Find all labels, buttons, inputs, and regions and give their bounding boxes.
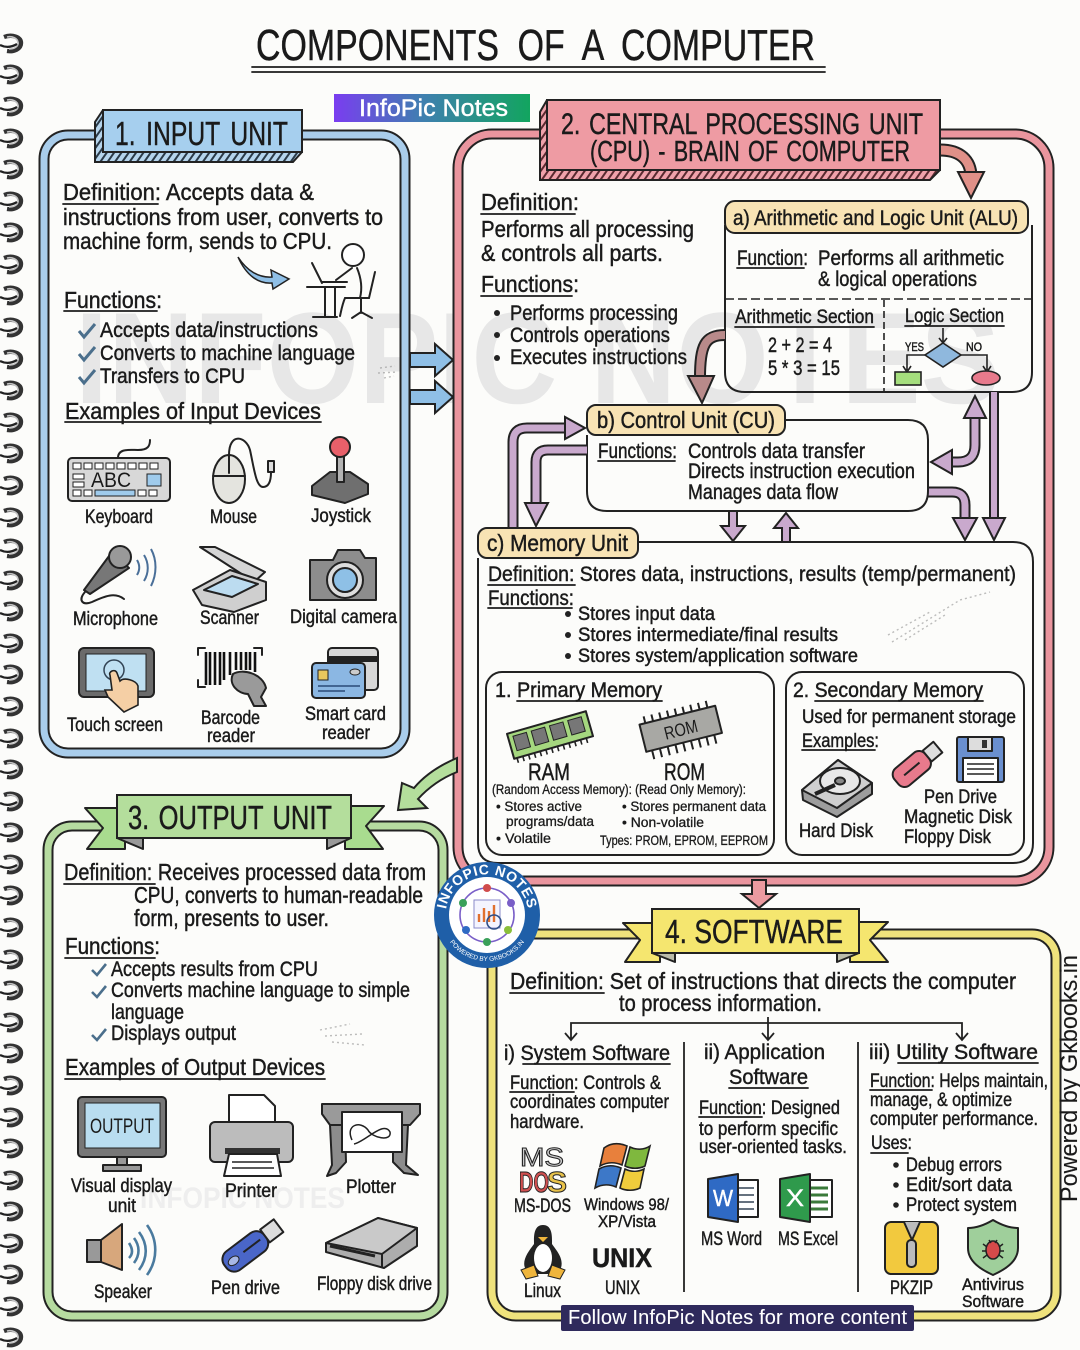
- label: microphone: Microphone: [73, 609, 158, 630]
- text: input functions: Functions:: [64, 287, 162, 313]
- text: CPU definition: Performs all processing: [481, 216, 694, 242]
- arrow: input to CPU lower: [410, 381, 453, 413]
- label: antivirus software: [962, 1275, 1024, 1311]
- icon: barcode reader: [198, 648, 266, 706]
- label: other storage devices: Floppy Disk: [904, 827, 991, 848]
- text: utility software function: manage, & optimize: [870, 1090, 1012, 1111]
- text: RAM notes: • Stores active: [496, 799, 582, 814]
- arrow: CPU heading to ALU: [940, 150, 984, 198]
- icon: printer: [210, 1095, 293, 1176]
- icon: MS-DOS logo: MS: [520, 1142, 564, 1172]
- footer banner: Follow InfoPic Notes for more content: [568, 1307, 907, 1329]
- text: utility software function: Function: Helps maintain,: [870, 1071, 1048, 1092]
- icon: visual display unit: [78, 1097, 166, 1171]
- icon: MS-DOS logo: S: [547, 1167, 567, 1199]
- text: ROM notes: [600, 799, 768, 848]
- heading: CPU: 2. CENTRAL PROCESSING UNIT: [561, 108, 923, 141]
- label: other storage devices: Magnetic Disk: [904, 807, 1012, 828]
- arrow: memory up to control unit: [774, 513, 798, 542]
- text: input definition: machine form, sends to CPU.: [63, 228, 332, 254]
- arrow: input to CPU upper: [410, 344, 453, 376]
- text: ALU function: & logical operations: [818, 268, 977, 291]
- smudge marks: [320, 366, 990, 1045]
- heading: secondary memory: 2. Secondary Memory: [793, 679, 983, 702]
- panel: control unit: [587, 405, 928, 511]
- arrow: control unit to memory left: [525, 450, 587, 526]
- label: Windows: Windows 98/: [584, 1195, 669, 1214]
- badge: InfoPic Notes logo: POWERED BY GKBOOKS.IN: [450, 940, 524, 961]
- panel: output unit: [48, 795, 443, 1316]
- tag: memory unit: c) Memory Unit: [487, 530, 629, 556]
- tag: ALU: a) Arithmetic and Logic Unit (ALU): [733, 207, 1018, 230]
- arrow: CPU to output unit: [398, 758, 457, 810]
- panel: secondary memory: [786, 672, 1024, 855]
- text: output functions: Displays output: [111, 1022, 236, 1045]
- text: ROM notes: • Non-volatile: [622, 815, 704, 830]
- text: secondary memory note: Used for permanent storage: [802, 707, 1016, 728]
- text: memory functions: Stores system/application software: [578, 646, 858, 667]
- text: output definition: form, presents to user.: [134, 905, 329, 931]
- text: input functions: Accepts data/instructions: [100, 319, 318, 342]
- arrow: control unit down to memory: [721, 511, 745, 541]
- icon: ROM chip: [638, 699, 724, 761]
- label: Windows: [584, 1195, 669, 1231]
- icon: pen drive: [889, 739, 945, 790]
- title: COMPONENTS OF A COMPUTER: [256, 21, 815, 70]
- icon: arrow to user: [238, 257, 289, 289]
- label: barcode reader: [201, 708, 260, 747]
- text: ALU function: Performs all arithmetic: [818, 247, 1004, 270]
- icon: MS Word: W: [713, 1185, 733, 1211]
- arrows: software branching tree: [565, 1017, 968, 1040]
- text: input functions: Converts to machine language: [100, 342, 355, 365]
- text: RAM notes: • Volatile: [496, 831, 551, 846]
- text: arithmetic section: 2 + 2 = 4: [768, 334, 832, 357]
- badge: InfoPic Notes logo: INFOPIC NOTES: [436, 864, 536, 908]
- text: utility software uses: Debug errors: [906, 1155, 1002, 1176]
- icon: keyboard: [68, 440, 170, 501]
- text: input definition: instructions from user, converts to: [63, 204, 383, 230]
- text: memory functions: Stores intermediate/final results: [578, 625, 838, 646]
- text: control unit functions: Functions:: [598, 440, 677, 463]
- text: output definition: Definition: Receives processed data from: [64, 859, 426, 885]
- column: application software: [699, 1041, 847, 1250]
- label: antivirus software: Software: [962, 1292, 1024, 1311]
- heading: system software: i) System Software: [504, 1042, 670, 1065]
- tag: control unit: b) Control Unit (CU): [597, 407, 775, 433]
- badge: InfoPic Notes logo: [434, 862, 540, 968]
- icon: person at computer: [307, 244, 375, 318]
- text: ALU function: Function:: [737, 247, 808, 270]
- arrow: control unit to memory right: [928, 492, 977, 540]
- label: barcode reader: Barcode: [201, 708, 260, 729]
- heading: software ribbon: [623, 909, 888, 962]
- heading: primary memory: 1. Primary Memory: [495, 679, 662, 702]
- text: ROM notes: • Stores permanent data: [622, 799, 766, 814]
- watermark: large INFOPIC NOTES: INFOPIC NOTES: [75, 285, 1000, 431]
- watermark: small INFOPIC NOTES: INFOPIC NOTES: [140, 1182, 345, 1215]
- label: floppy disk drive: Floppy disk drive: [317, 1274, 432, 1295]
- heading: examples of input devices: Examples of Input Devices: [65, 398, 321, 424]
- arrow: CPU to software: [742, 880, 776, 908]
- arrow: control unit and ALU two-way: [931, 396, 986, 474]
- icon: ROM chip: ROM: [662, 716, 700, 744]
- text: output functions: language: [111, 1001, 184, 1024]
- icon: MS Excel: [780, 1174, 832, 1222]
- text and flowchart: logic section: NO: [966, 340, 982, 354]
- text: utility software uses: Uses:: [871, 1133, 912, 1154]
- text: memory functions: [488, 587, 858, 667]
- text: ALU function: [737, 247, 1004, 291]
- label: smart card reader: Smart card: [305, 704, 386, 725]
- icon: mouse: [213, 439, 274, 503]
- icon: digital camera: [310, 550, 376, 600]
- text: application software function: user-oriented tasks.: [699, 1137, 847, 1158]
- text: output functions: Accepts results from CPU: [111, 958, 318, 981]
- text: memory functions: Stores input data: [578, 604, 715, 625]
- text: ROM notes: Types: PROM, EPROM, EEPROM: [600, 833, 768, 848]
- text: application software function: to perform specific: [699, 1119, 838, 1140]
- label: MS Excel: MS Excel: [778, 1229, 838, 1250]
- panel: arithmetic and logic unit: [725, 201, 1032, 392]
- label: touch screen: Touch screen: [67, 715, 163, 736]
- label: keyboard: Keyboard: [85, 507, 153, 528]
- text: system software function: coordinates computer: [510, 1092, 670, 1113]
- heading: application software: ii) Application: [704, 1041, 825, 1064]
- heading: examples of output devices: Examples of Output Devices: [65, 1054, 325, 1080]
- heading: utility software: iii) Utility Software: [869, 1041, 1038, 1064]
- label: joystick: Joystick: [311, 506, 371, 527]
- text: system software function: hardware.: [510, 1112, 584, 1133]
- heading: CPU: [540, 100, 940, 180]
- label: barcode reader: reader: [207, 726, 256, 747]
- label: digital camera: Digital camera: [290, 607, 397, 628]
- text and flowchart: logic section: [895, 306, 1004, 385]
- icon: MS Word: [708, 1174, 758, 1222]
- label: Windows: XP/Vista: [598, 1212, 656, 1231]
- label: scanner: Scanner: [200, 608, 260, 629]
- label: other storage devices: [904, 787, 1012, 848]
- text: input definition: Definition: Accepts data &: [63, 179, 314, 205]
- label: hard disk: Hard Disk: [799, 821, 873, 842]
- icon: keyboard: ABC: [91, 469, 131, 492]
- text: CPU definition: & controls all parts.: [481, 240, 663, 266]
- text: control unit functions: Manages data flow: [688, 481, 839, 504]
- text: memory definition: Definition: Stores data, instructions, results (temp/permanent): [488, 563, 1016, 586]
- text: arithmetic section: 5 * 3 = 15: [768, 357, 840, 380]
- icon: floppy disk drive: [326, 1218, 417, 1268]
- heading: CPU: (CPU) - BRAIN OF COMPUTER: [590, 136, 910, 168]
- text: output functions: Converts machine language to simple: [111, 979, 410, 1002]
- arrow: memory to control unit left: [513, 417, 585, 528]
- text: examples: Examples:: [802, 731, 879, 752]
- label: visual display unit: [71, 1176, 172, 1217]
- text: utility software uses: [871, 1133, 1017, 1216]
- text: input functions: [64, 287, 355, 388]
- icon: MS-DOS logo: DO: [519, 1167, 549, 1199]
- label: ROM: ROM: [664, 759, 705, 786]
- label: speaker: Speaker: [94, 1282, 153, 1303]
- panel: input unit: [44, 110, 405, 753]
- text: control unit functions: [598, 440, 915, 504]
- text: control unit functions: Directs instruction execution: [688, 460, 915, 483]
- text: system software function: Function: Controls &: [510, 1073, 661, 1094]
- icon: RAM stick: [507, 711, 594, 764]
- text: utility software function: [870, 1071, 1048, 1130]
- text: utility software uses: Protect system: [906, 1195, 1017, 1216]
- text: CPU functions: Controls operations: [510, 324, 670, 347]
- label: smart card reader: reader: [322, 723, 371, 744]
- text: input functions: Transfers to CPU: [100, 365, 245, 388]
- text: output functions: Functions:: [65, 933, 160, 959]
- panel: central processing unit: [458, 100, 1049, 881]
- label: visual display unit: unit: [108, 1196, 137, 1217]
- icon: hard disk: [802, 760, 872, 817]
- icon: MS-DOS logo: [519, 1142, 567, 1199]
- text: application software function: [699, 1098, 847, 1158]
- icon: antivirus shield: [968, 1220, 1018, 1275]
- panel: primary memory: [486, 672, 774, 855]
- label: printer: Printer: [225, 1181, 278, 1202]
- heading: application software: [704, 1041, 825, 1089]
- brand banner: InfoPic Notes: [359, 95, 508, 122]
- arrow: ALU to memory: [983, 392, 1005, 540]
- icon: touch screen: [79, 648, 154, 712]
- icon: speaker: [87, 1224, 155, 1275]
- text: utility software uses: Edit/sort data: [906, 1175, 1012, 1196]
- text: system software function: [510, 1073, 670, 1133]
- heading: software ribbon: 4. SOFTWARE: [665, 913, 843, 950]
- icon: smart card: [312, 648, 378, 698]
- text and flowchart: logic section: Logic Section: [905, 306, 1004, 327]
- icon: PKZIP: [885, 1222, 938, 1274]
- text: CPU functions: [481, 271, 687, 369]
- label: antivirus software: Antivirus: [962, 1275, 1024, 1294]
- column: system software: [504, 1042, 670, 1302]
- text and flowchart: logic section: YES: [905, 340, 924, 354]
- heading: output unit ribbon: [85, 795, 384, 849]
- spiral binding: [0, 36, 21, 1345]
- text: CPU functions: Functions:: [481, 271, 579, 297]
- label: other storage devices: Pen Drive: [924, 787, 997, 808]
- label: smart card reader: [305, 704, 386, 744]
- arrow: ALU to control unit: [688, 335, 725, 403]
- text: software definition: to process information.: [619, 990, 822, 1016]
- text: arithmetic section: Arithmetic Section: [735, 307, 874, 328]
- text: CPU definition: [481, 189, 694, 266]
- label: PKZIP: PKZIP: [890, 1278, 933, 1299]
- label: plotter: Plotter: [346, 1177, 397, 1198]
- label: visual display unit: Visual display: [71, 1176, 172, 1197]
- icon: joystick: [312, 437, 368, 503]
- text: memory functions: Functions:: [488, 587, 574, 610]
- text: control unit functions: Controls data transfer: [688, 440, 865, 463]
- text: output definition: CPU, converts to human-readable: [134, 882, 423, 908]
- label: RAM: RAM: [528, 759, 570, 786]
- text: software definition: Definition: Set of instructions that directs the computer: [510, 968, 1016, 994]
- heading: application software: Software: [729, 1066, 808, 1089]
- icon: microphone: [81, 546, 156, 603]
- icon: MS Excel: X: [786, 1185, 804, 1212]
- label: pen drive: Pen drive: [211, 1278, 280, 1299]
- icon: floppy disk: [957, 737, 1004, 782]
- text: input definition: [63, 179, 383, 254]
- icon: scanner: [193, 547, 266, 612]
- text: RAM notes: [496, 799, 594, 846]
- text: arithmetic section: [735, 307, 874, 380]
- label: MS Word: MS Word: [701, 1229, 762, 1250]
- text: CPU functions: Executes instructions: [510, 346, 687, 369]
- panel: memory unit: [478, 528, 1033, 863]
- icon: Linux penguin: [521, 1225, 565, 1279]
- logo text: UNIX: UNIX: [592, 1243, 652, 1273]
- heading: output unit ribbon: 3. OUTPUT UNIT: [128, 799, 332, 836]
- icon: pen drive: [218, 1217, 286, 1276]
- label: MS-DOS: MS-DOS: [514, 1196, 571, 1217]
- tag: ALU: [725, 201, 1028, 233]
- text: output functions: [65, 933, 410, 1045]
- heading: input unit: [95, 110, 302, 162]
- icon: visual display unit: OUTPUT: [90, 1115, 154, 1138]
- text: application software function: Function: Designed: [699, 1098, 840, 1119]
- column: utility software: [869, 1041, 1048, 1311]
- text: CPU functions: Performs processing: [510, 302, 678, 325]
- text: utility software function: computer performance.: [870, 1109, 1038, 1130]
- text: software definition: [510, 968, 1016, 1016]
- text: RAM notes: programs/data: [506, 814, 594, 829]
- icon: plotter: [322, 1104, 420, 1176]
- text: CPU definition: Definition:: [481, 189, 579, 215]
- panel: software: [492, 880, 1056, 1316]
- label: mouse: Mouse: [210, 507, 257, 528]
- label: Linux: Linux: [524, 1281, 561, 1302]
- label: UNIX: UNIX: [605, 1278, 640, 1299]
- text: output definition: [64, 859, 426, 931]
- icon: Windows logo: [595, 1144, 650, 1190]
- text: memory type full names: (Random Access Memory): (Read Only Memory):: [492, 782, 746, 797]
- heading: input unit: 1. INPUT UNIT: [115, 115, 288, 152]
